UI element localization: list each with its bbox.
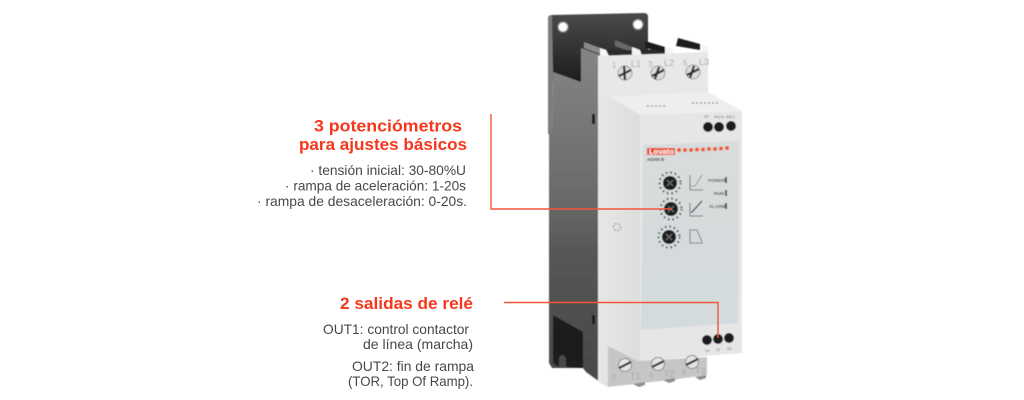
bottom terminal block: T3 xyxy=(695,366,706,376)
top terminal block xyxy=(598,52,742,115)
top terminal block: L3 xyxy=(699,57,709,67)
device: soft starter xyxy=(548,13,742,387)
bottom terminal block: 2 xyxy=(612,373,617,382)
text block: OUT2: (TOR, Top Of Ramp). xyxy=(348,373,473,389)
text block: potentiometer ranges: · rampa de desaceleración: 0-20s. xyxy=(257,193,467,209)
potentiometer 1 xyxy=(660,172,680,194)
top control sockets: A1(+) xyxy=(714,114,725,119)
bottom relay sockets xyxy=(702,333,734,353)
heading: relay outputs: 2 salidas de relé xyxy=(340,295,473,313)
bottom relay sockets: 11 xyxy=(716,347,721,352)
heading: potentiometers xyxy=(299,118,467,154)
top terminal block: L2 xyxy=(664,58,674,68)
bottom terminal block: 6 xyxy=(682,368,687,377)
text block: OUT1 xyxy=(323,321,473,352)
top terminal block: 5 xyxy=(683,59,688,68)
brand logo: ADXN B xyxy=(647,157,665,162)
bottom relay sockets: 14 xyxy=(705,348,710,353)
brand logo xyxy=(647,148,675,162)
bottom relay sockets: 24 xyxy=(727,346,732,351)
text block: OUT2: OUT2: fin de rampa xyxy=(352,358,474,374)
status labels: ALARM xyxy=(709,204,726,209)
top terminal block: L1 xyxy=(631,59,641,69)
heading: potentiometers: 3 potenciómetros xyxy=(314,118,462,136)
front label panel xyxy=(641,141,739,330)
module side xyxy=(598,55,640,387)
side mark xyxy=(614,224,620,230)
top control sockets xyxy=(703,114,736,132)
bottom terminal block xyxy=(608,346,707,387)
heading: potentiometers: para ajustes básicos xyxy=(299,136,467,154)
callout: potentiometers xyxy=(257,118,467,209)
bottom terminal block: T1 xyxy=(630,371,641,381)
status labels: RUN xyxy=(714,191,725,196)
text block: OUT1: OUT1: control contactor xyxy=(323,321,469,337)
status labels xyxy=(708,177,727,209)
text block: OUT1: de línea (marcha) xyxy=(363,336,473,352)
top terminal block: 1 xyxy=(612,61,617,70)
LED strip xyxy=(677,146,729,152)
top control sockets: ST xyxy=(704,114,710,119)
front housing xyxy=(640,111,742,361)
text block: potentiometer ranges xyxy=(257,162,467,209)
status labels: POWER xyxy=(708,178,726,183)
text block: OUT2 xyxy=(348,358,474,389)
leader line: potentiometers xyxy=(491,114,672,209)
potentiometer 3 xyxy=(658,226,680,248)
ramp symbols xyxy=(690,175,703,243)
potentiometer 2 xyxy=(660,198,682,220)
callout: relay outputs xyxy=(323,295,474,389)
text block: potentiometer ranges: · rampa de aceleración: 1-20s xyxy=(285,178,466,194)
bottom terminal block: T2 xyxy=(664,369,675,379)
top terminal block: 3 xyxy=(648,60,653,69)
bracket side xyxy=(549,48,600,382)
text block: potentiometer ranges: · tensión inicial: 30-80%U xyxy=(310,162,466,178)
top control sockets: A2(-) xyxy=(726,114,736,119)
leader line: relay outputs xyxy=(504,302,718,338)
back bracket plate xyxy=(548,13,648,134)
bottom terminal block: 4 xyxy=(649,371,654,380)
brand logo: Lovato xyxy=(649,149,674,156)
top terminal clips xyxy=(584,38,708,56)
